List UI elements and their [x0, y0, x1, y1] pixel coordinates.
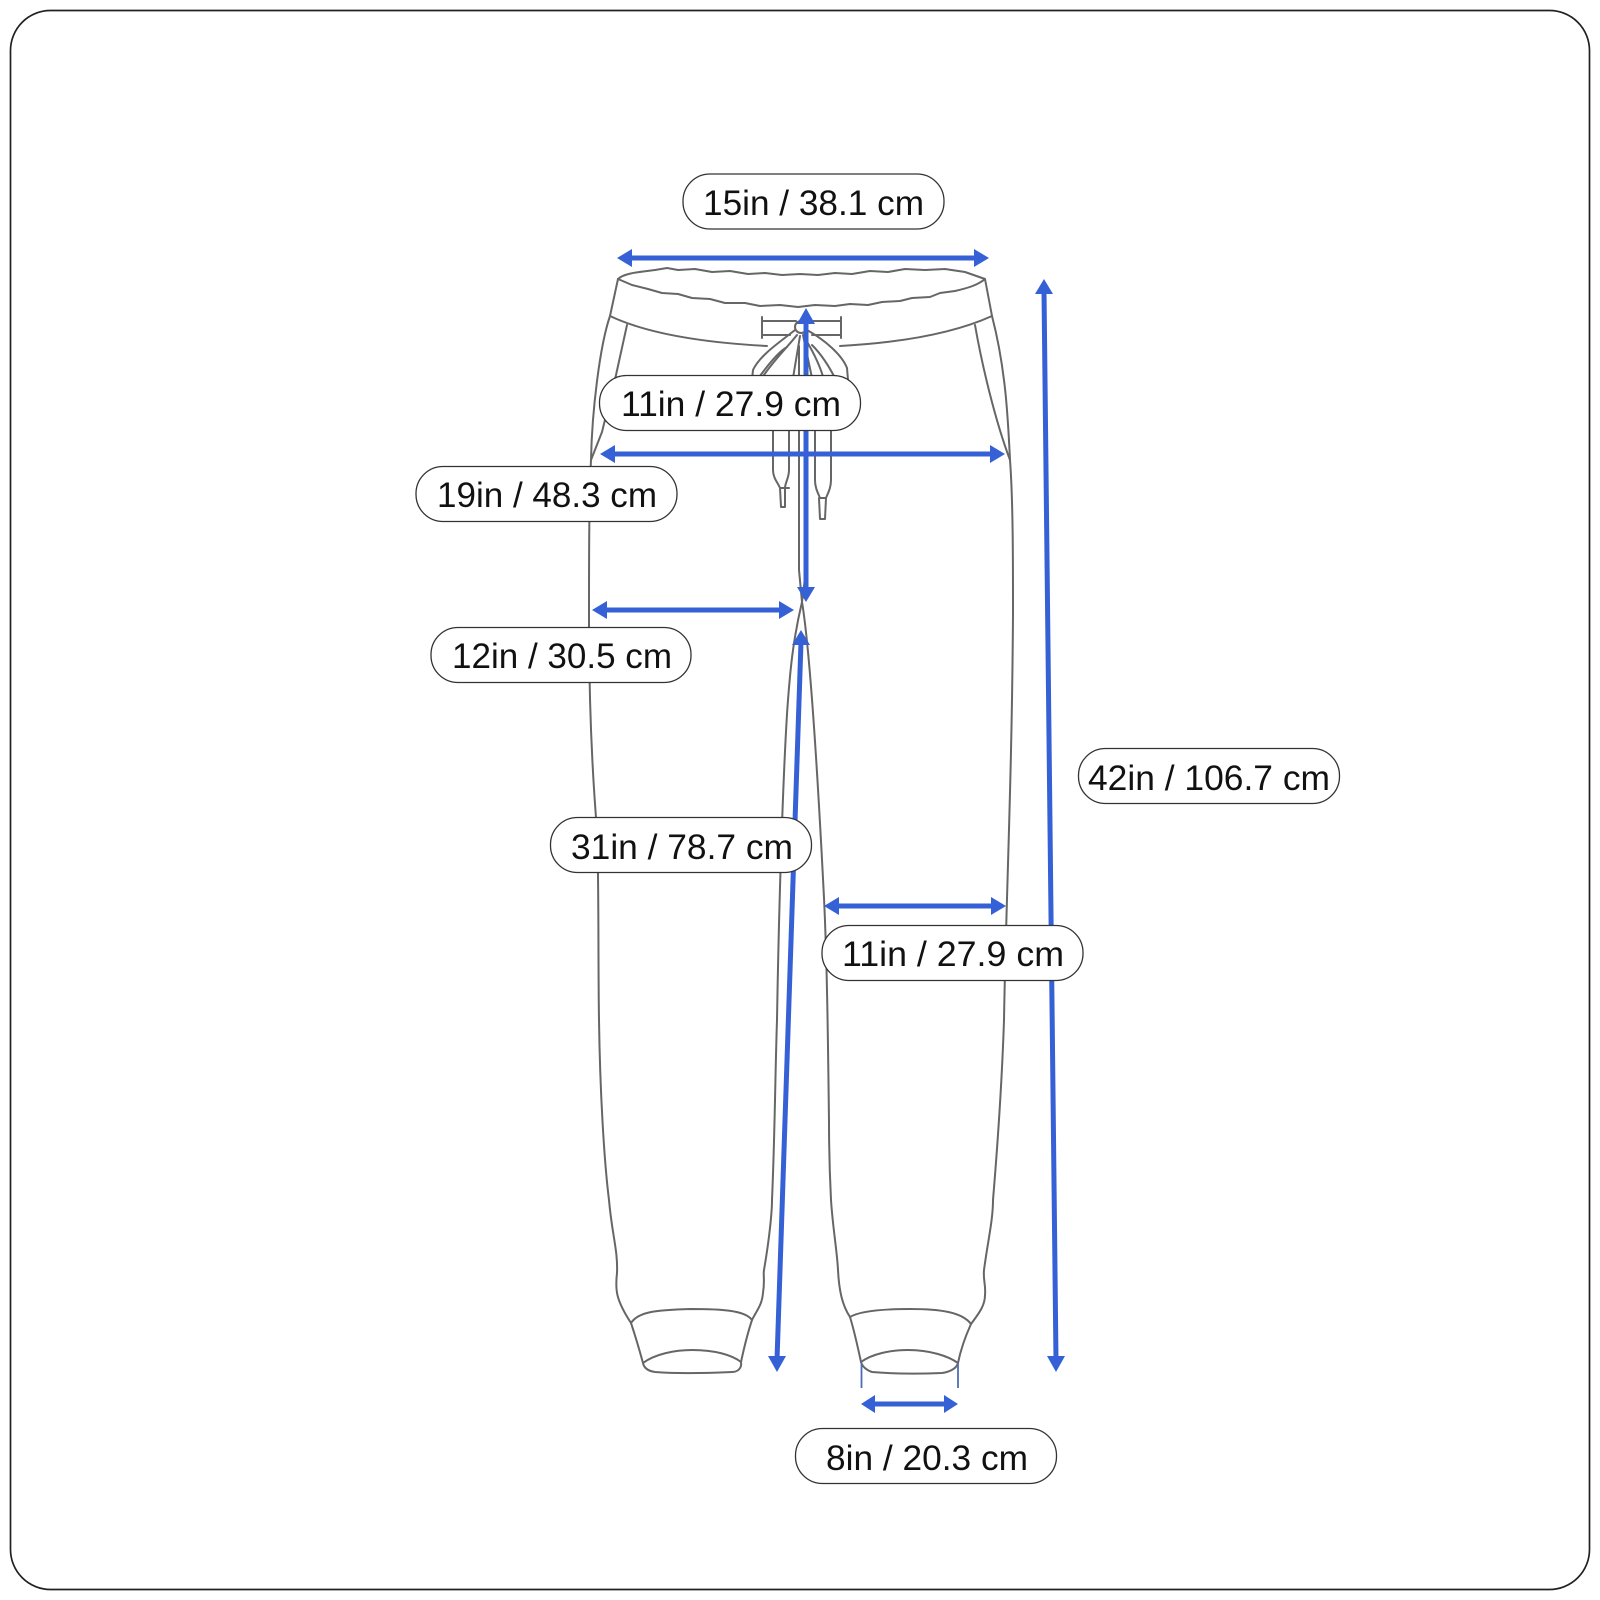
left cuff [631, 1309, 752, 1373]
arrow: hip width [592, 601, 794, 619]
label: length 42in [1078, 748, 1340, 804]
label: waistband 15in: 15in / 38.1 cm [703, 184, 924, 223]
label: waist 19in [416, 466, 677, 522]
arrow: rise [797, 308, 815, 602]
arrow: cuff width [861, 1363, 958, 1413]
pockets [591, 325, 1010, 460]
left leg outline [589, 316, 643, 1363]
arrow: waistband width [617, 249, 989, 267]
right cuff [850, 1309, 971, 1374]
arrow: thigh width [824, 897, 1006, 915]
waistband [610, 268, 992, 346]
label: waist 19in: 19in / 48.3 cm [437, 476, 657, 515]
right leg inner seam [802, 602, 861, 1362]
label: thigh 11in: 11in / 27.9 cm [842, 935, 1064, 974]
arrow: waist stretched width [600, 445, 1005, 463]
label: inseam 31in: 31in / 78.7 cm [571, 828, 793, 867]
label: cuff 8in [796, 1428, 1056, 1484]
label: hip 12in [431, 628, 691, 682]
drawstring [752, 317, 848, 519]
label: hip 12in: 12in / 30.5 cm [452, 637, 672, 676]
pants outline drawing [589, 268, 1013, 1374]
label: rise 11in [600, 376, 860, 430]
label: inseam 31in [550, 818, 812, 872]
center fly [799, 346, 806, 602]
label: rise 11in: 11in / 27.9 cm [621, 385, 841, 424]
label: waistband 15in [683, 174, 944, 229]
left leg inner seam [741, 602, 802, 1362]
label: length 42in: 42in / 106.7 cm [1088, 759, 1330, 798]
label: thigh 11in [822, 926, 1083, 980]
right leg outline [958, 316, 1013, 1363]
arrow: inseam [768, 630, 810, 1372]
label: cuff 8in: 8in / 20.3 cm [826, 1439, 1028, 1478]
arrow: total length [1035, 279, 1065, 1372]
